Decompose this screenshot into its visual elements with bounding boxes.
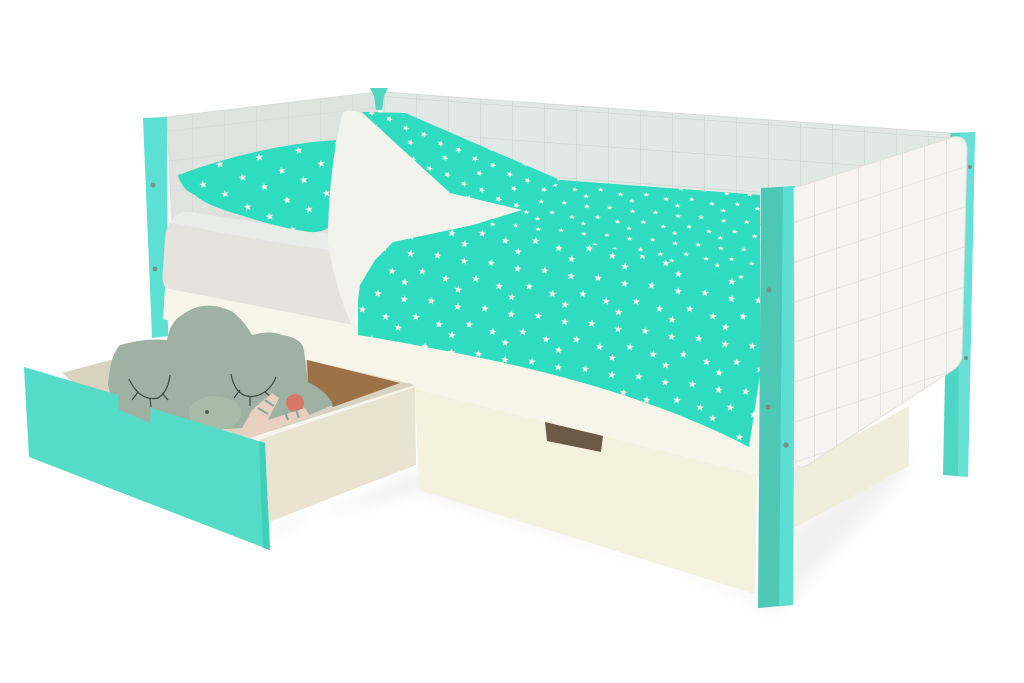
dark interior shadow <box>307 360 400 407</box>
floor shadows <box>270 445 905 612</box>
drawer side <box>253 385 416 522</box>
drawer teal front <box>24 367 270 550</box>
drawer front edge <box>259 441 270 550</box>
plush rabbit <box>239 393 310 438</box>
mattress <box>162 212 355 335</box>
drawer: teal, open <box>24 306 416 550</box>
sleeping eye right <box>231 374 276 406</box>
sleeping eye left <box>129 375 170 407</box>
right storage box under bed <box>790 406 909 530</box>
white folded blanket corner <box>328 110 522 330</box>
drawer: cream <box>415 389 757 594</box>
teal pillow <box>178 140 336 232</box>
back long quilted panel <box>383 92 950 225</box>
left headboard quilted panel <box>167 92 380 245</box>
cloud cushion <box>108 306 333 432</box>
bed frame rail <box>163 288 759 476</box>
back right post <box>943 132 975 477</box>
right quilted side panel <box>794 137 967 467</box>
teal duvet with stars <box>358 112 760 447</box>
pink sun patch <box>286 394 304 412</box>
corner post top <box>370 88 388 110</box>
front post <box>758 186 795 608</box>
plush elephant <box>189 396 241 430</box>
drawer interior <box>62 360 415 437</box>
left post <box>143 117 168 338</box>
